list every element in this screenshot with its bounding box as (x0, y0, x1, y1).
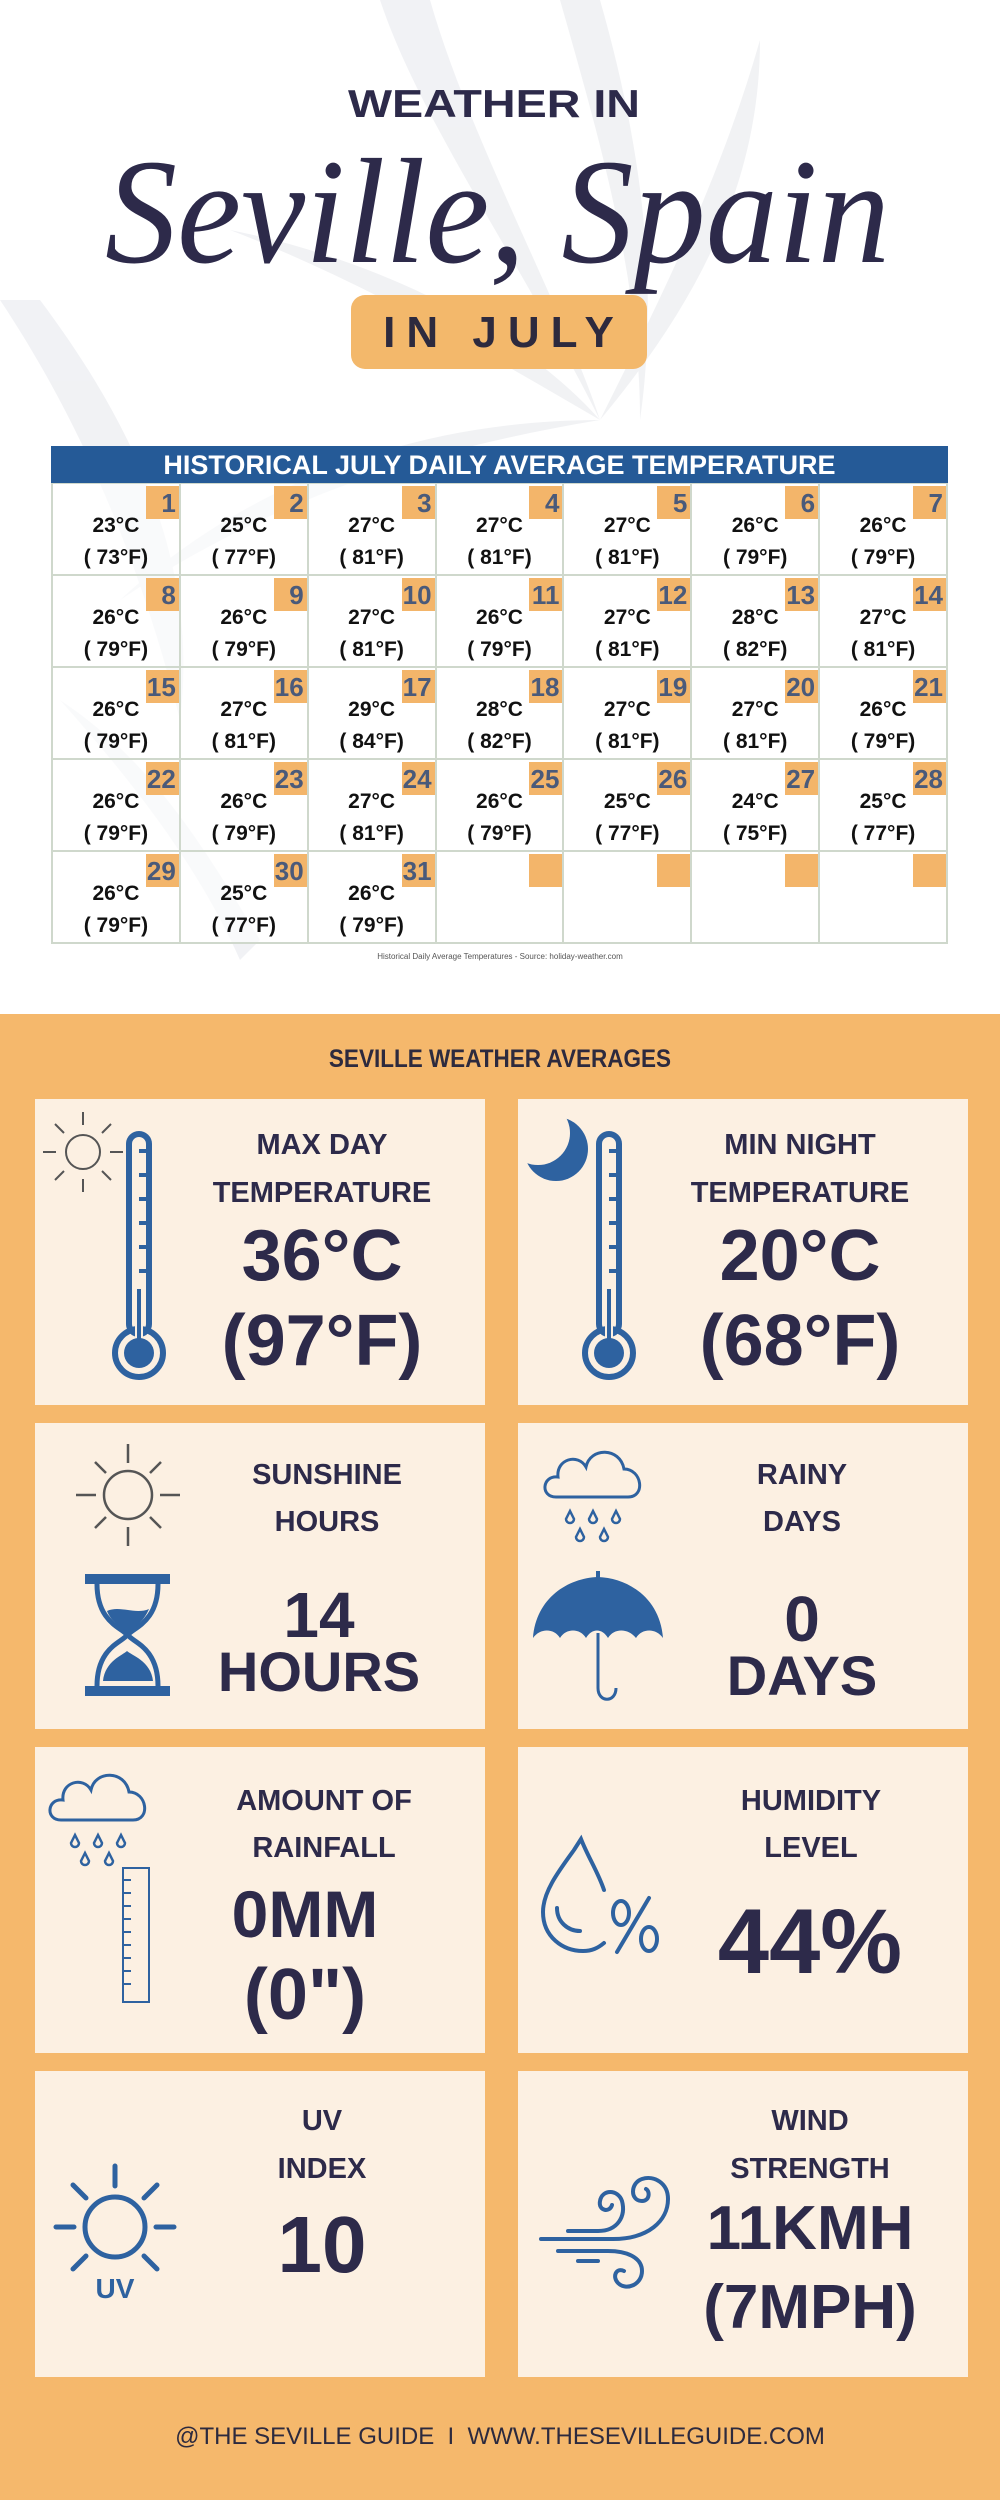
calendar grid: 6 (801, 488, 815, 518)
calendar grid: ( 81°F) (595, 546, 660, 569)
calendar grid: 24°C (732, 790, 779, 813)
calendar grid: 26°C (92, 606, 139, 629)
calendar grid: 25°C (604, 790, 651, 813)
text: MIN NIGHT (724, 1129, 876, 1161)
text: SUNSHINE (252, 1459, 402, 1491)
calendar grid: ( 81°F) (595, 730, 660, 753)
calendar grid: ( 73°F) (84, 546, 148, 569)
text (232, 1785, 412, 2035)
calendar grid: 4 (545, 488, 559, 518)
calendar grid: 14 (914, 580, 943, 610)
calendar grid: ( 81°F) (212, 730, 276, 753)
text: 44% (718, 1891, 902, 1993)
calendar grid: ( 77°F) (851, 822, 915, 845)
panel: min night temperature (518, 1099, 968, 1405)
text: INDEX (278, 2153, 367, 2185)
calendar grid: ( 79°F) (212, 822, 276, 845)
calendar grid: 28°C (732, 606, 779, 629)
calendar grid: ( 79°F) (467, 822, 532, 845)
text: TEMPERATURE (213, 1177, 431, 1209)
badge: in july (351, 295, 647, 369)
panel: humidity level (518, 1747, 968, 2053)
text: DAYS (763, 1506, 841, 1538)
calendar grid: ( 82°F) (723, 638, 787, 661)
text: (97°F) (222, 1301, 422, 1381)
calendar grid: 12 (658, 580, 687, 610)
calendar grid: ( 79°F) (212, 638, 276, 661)
calendar grid: 15 (147, 672, 176, 702)
calendar grid: 25°C (220, 882, 267, 905)
calendar grid: 24 (403, 764, 432, 794)
calendar grid (51, 483, 948, 944)
text: RAINY (757, 1459, 847, 1491)
panel: rainy days (518, 1423, 968, 1729)
calendar grid: 16 (275, 672, 304, 702)
calendar grid: 26°C (476, 790, 523, 813)
calendar grid: 22 (147, 764, 176, 794)
calendar grid: 13 (786, 580, 815, 610)
calendar grid: 29°C (348, 698, 395, 721)
section heading: SEVILLE WEATHER AVERAGES (329, 1045, 671, 1073)
calendar grid: ( 77°F) (212, 546, 276, 569)
text: 0MM (232, 1877, 378, 1951)
calendar grid: 27°C (348, 606, 395, 629)
calendar (51, 446, 948, 944)
text: (7MPH) (703, 2273, 917, 2342)
calendar grid: 31 (403, 856, 432, 886)
calendar grid: ( 79°F) (84, 638, 148, 661)
calendar grid: 28 (914, 764, 943, 794)
calendar grid: ( 77°F) (595, 822, 660, 845)
calendar grid: 27°C (220, 698, 267, 721)
calendar grid: 26°C (732, 514, 779, 537)
icon: cloud and umbrella (533, 1452, 663, 1699)
calendar grid: 26°C (92, 882, 139, 905)
calendar grid: 27°C (348, 790, 395, 813)
calendar grid: ( 79°F) (851, 546, 915, 569)
icon: sun and thermometer (43, 1112, 163, 1377)
calendar grid: 26°C (220, 790, 267, 813)
icon: moon and thermometer (506, 1101, 633, 1377)
calendar grid: 11 (532, 580, 559, 610)
text: UV (302, 2105, 343, 2137)
calendar grid: 3 (417, 488, 432, 518)
text: TEMPERATURE (691, 1177, 909, 1209)
calendar grid: ( 81°F) (595, 638, 660, 661)
calendar header: HISTORICAL JULY DAILY AVERAGE TEMPERATURE (163, 450, 836, 480)
text: (0") (244, 1955, 366, 2035)
calendar grid: 1 (161, 488, 176, 518)
text: HUMIDITY (741, 1785, 881, 1817)
title (105, 83, 890, 295)
icon: wind (541, 2178, 668, 2287)
calendar grid: 26°C (476, 606, 523, 629)
text: RAINFALL (252, 1832, 396, 1864)
text: 20°C (720, 1216, 880, 1296)
calendar grid: ( 77°F) (212, 914, 276, 937)
text: WIND (771, 2105, 849, 2137)
text (213, 1129, 431, 1381)
text: AMOUNT OF (236, 1785, 412, 1817)
calendar grid: ( 81°F) (467, 546, 532, 569)
calendar grid: 8 (161, 580, 176, 610)
calendar grid: 23 (275, 764, 304, 794)
calendar grid: 23°C (92, 514, 139, 537)
text (718, 1785, 902, 1993)
text: 14 (283, 1579, 355, 1651)
text: DAYS (727, 1644, 877, 1707)
calendar grid: 19 (658, 672, 687, 702)
icon: uv sun: UV (96, 2273, 135, 2304)
calendar grid: ( 75°F) (723, 822, 787, 845)
calendar grid: ( 79°F) (84, 822, 148, 845)
calendar grid: 28°C (476, 698, 523, 721)
icon: humidity drop (543, 1839, 657, 1952)
text: (68°F) (700, 1301, 900, 1381)
calendar grid: 26°C (860, 698, 907, 721)
calendar grid: ( 79°F) (851, 730, 915, 753)
text (703, 2105, 917, 2342)
calendar grid: 27°C (604, 514, 651, 537)
calendar grid: ( 79°F) (84, 730, 148, 753)
calendar grid: ( 79°F) (467, 638, 532, 661)
calendar grid: 26 (658, 764, 687, 794)
title: weather in: WEATHER IN (348, 83, 640, 126)
calendar grid: ( 82°F) (467, 730, 532, 753)
calendar grid: 18 (530, 672, 559, 702)
calendar grid: 27°C (604, 698, 651, 721)
text (691, 1129, 909, 1381)
panel: amount of rainfall (35, 1747, 485, 2053)
calendar grid: ( 79°F) (723, 546, 787, 569)
text (278, 2105, 367, 2289)
calendar grid: 20 (786, 672, 815, 702)
calendar grid: 17 (403, 672, 432, 702)
text: 0 (784, 1583, 820, 1655)
calendar grid: 25°C (860, 790, 907, 813)
calendar grid: 26°C (348, 882, 395, 905)
text: MAX DAY (256, 1129, 388, 1161)
text: HOURS (275, 1506, 379, 1538)
calendar grid: ( 79°F) (84, 914, 148, 937)
text: 36°C (242, 1216, 402, 1296)
panel: max day temperature (35, 1099, 485, 1405)
icon: sun and hourglass (76, 1444, 180, 1696)
calendar grid: 26°C (92, 790, 139, 813)
panel: wind strength (518, 2071, 968, 2377)
badge: in july: IN JULY (383, 308, 625, 357)
text: STRENGTH (730, 2153, 890, 2185)
calendar grid: ( 81°F) (339, 822, 404, 845)
source note: Historical Daily Average Temperatures - Source: holiday-weather.com (377, 952, 623, 961)
calendar grid: 9 (289, 580, 304, 610)
calendar grid: 5 (673, 488, 687, 518)
calendar grid: 27 (786, 764, 815, 794)
orange section (0, 1014, 1000, 2500)
panel: sunshine hours (35, 1423, 485, 1729)
icon: uv sun (56, 2166, 174, 2304)
calendar grid: 26°C (860, 514, 907, 537)
text: 10 (278, 2200, 366, 2289)
calendar grid: 26°C (92, 698, 139, 721)
calendar grid: ( 81°F) (339, 546, 404, 569)
calendar grid: 27°C (732, 698, 779, 721)
icon: cloud and rain gauge (50, 1775, 149, 2002)
calendar grid: ( 81°F) (723, 730, 787, 753)
calendar grid: 10 (403, 580, 432, 610)
calendar grid: 27°C (348, 514, 395, 537)
text (727, 1459, 877, 1707)
calendar grid: 30 (275, 856, 304, 886)
calendar grid: 27°C (476, 514, 523, 537)
text: HOURS (218, 1640, 420, 1703)
calendar grid: 27°C (604, 606, 651, 629)
panel: uv index (35, 2071, 485, 2377)
background palm leaves (0, 0, 760, 960)
calendar grid: 2 (289, 488, 304, 518)
calendar grid: 25 (530, 764, 559, 794)
title: seville spain: Seville, Spain (105, 129, 890, 295)
calendar grid: ( 81°F) (851, 638, 915, 661)
text: 11KMH (707, 2194, 913, 2263)
calendar grid: 21 (914, 672, 943, 702)
calendar header (51, 446, 948, 483)
calendar grid: 7 (929, 488, 943, 518)
footer: @THE SEVILLE GUIDE I WWW.THESEVILLEGUIDE.COM (175, 2423, 825, 2450)
calendar grid: 29 (147, 856, 176, 886)
text (218, 1459, 420, 1703)
calendar grid: 27°C (860, 606, 907, 629)
calendar grid: ( 81°F) (339, 638, 404, 661)
text: LEVEL (764, 1832, 858, 1864)
calendar grid: ( 79°F) (339, 914, 404, 937)
calendar grid: ( 84°F) (339, 730, 404, 753)
calendar grid: 25°C (220, 514, 267, 537)
calendar grid: 26°C (220, 606, 267, 629)
